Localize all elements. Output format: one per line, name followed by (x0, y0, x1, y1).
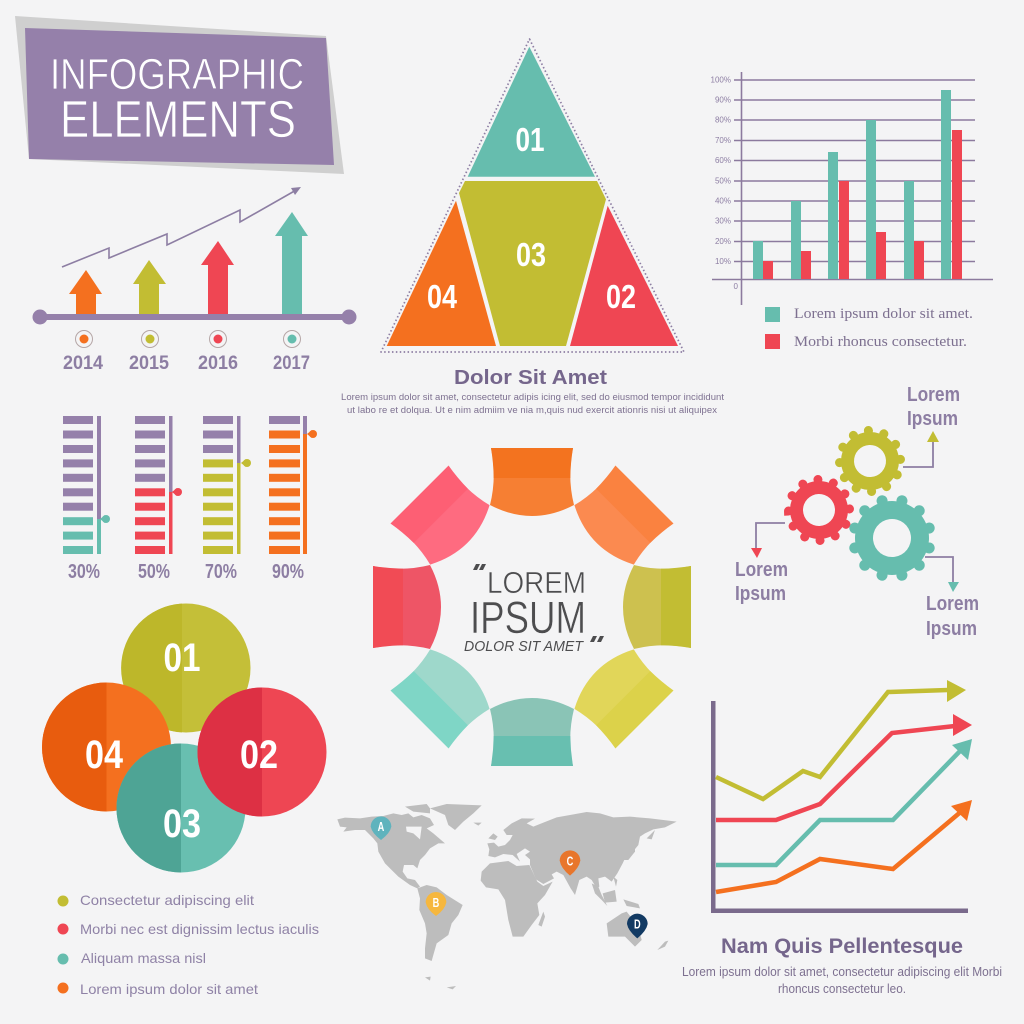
gear labels: Lorem (907, 384, 960, 406)
connector arrow: red gear (751, 523, 785, 558)
pin D (627, 914, 648, 938)
segment 03 (459, 181, 606, 346)
gear labels: Lorem (926, 593, 979, 615)
circles legend: Morbi nec est dignissim lectus iaculis (80, 921, 319, 937)
gear: teal (845, 491, 939, 585)
chart axes (711, 701, 968, 913)
circle numbers: 04 (85, 733, 124, 777)
ring segment: olive (623, 565, 691, 649)
octagonal ring diagram (373, 448, 691, 766)
year labels: 2016 (198, 353, 238, 374)
column 30% (63, 416, 110, 583)
axis labels: 20% (715, 237, 731, 246)
gear labels: Ipsum (926, 618, 977, 640)
circle numbers: 02 (240, 733, 278, 777)
gear labels (735, 384, 979, 640)
world map with pins (337, 804, 677, 989)
ring centre text: LOREM (487, 565, 586, 600)
pin A: A (378, 820, 384, 834)
pin C (560, 850, 580, 876)
axis labels (711, 76, 739, 291)
gear: olive (838, 429, 902, 493)
trend line arrow (62, 187, 301, 267)
gear labels: Ipsum (735, 583, 786, 605)
progress columns (63, 416, 317, 583)
triangle description (341, 392, 724, 416)
growth arrows timeline (32, 187, 356, 374)
axis labels: 0 (734, 282, 739, 291)
grid lines and axes (712, 72, 993, 305)
ring segment: mint (390, 642, 497, 749)
bar chart legend (765, 306, 973, 350)
segment 02 (570, 206, 678, 346)
circle 01 (121, 604, 251, 732)
ring segment: orange top (490, 448, 574, 516)
circles legend: Consectetur adipiscing elit (80, 892, 254, 908)
gear labels: Lorem (735, 559, 788, 581)
ring centre text (464, 564, 604, 655)
year labels: 2015 (129, 353, 169, 374)
line chart description: Lorem ipsum dolor sit amet, consectetur adipiscing elit Morbi (682, 965, 1002, 979)
overlapping circles diagram (42, 604, 326, 872)
year labels: 2017 (273, 353, 310, 374)
arrow 2017 (275, 212, 308, 315)
ring segment: red (373, 565, 441, 649)
axis labels: 70% (715, 136, 731, 145)
dotted outline (381, 39, 684, 352)
red line arrow (716, 714, 972, 820)
column 90%: 90% (272, 561, 304, 583)
arrow 2016 (201, 241, 234, 315)
segment numbers: 03 (516, 236, 546, 273)
arrow 2014 (69, 270, 102, 315)
title banner (15, 16, 344, 174)
circle numbers (85, 636, 278, 846)
axis labels: 50% (715, 176, 731, 186)
ring segment: yellow (567, 642, 674, 749)
axis labels: 10% (715, 257, 731, 266)
pin A (371, 816, 391, 840)
axis labels: 30% (715, 216, 731, 226)
ring segment: teal bottom (490, 698, 574, 766)
axis labels: 90% (715, 96, 731, 104)
circles legend: Aliquam massa nisl (81, 950, 206, 966)
circle 04 (42, 682, 171, 812)
circle numbers: 01 (164, 636, 200, 680)
connector arrow: olive gear (903, 431, 939, 467)
hudson bay (406, 827, 422, 839)
segment numbers: 04 (427, 278, 458, 315)
red bars (763, 130, 962, 279)
axis labels: 100% (711, 76, 731, 84)
triangle diagram (341, 39, 724, 416)
circles legend: Lorem ipsum dolor sit amet (80, 981, 258, 997)
column 50%: 50% (138, 561, 170, 583)
timeline axis (32, 310, 356, 324)
bar chart (711, 72, 993, 350)
bar chart legend: Morbi rhoncus consectetur. (794, 334, 967, 350)
column 90% (269, 416, 317, 583)
circle 02 (198, 688, 326, 816)
arrow 2015 (133, 260, 166, 315)
title banner: ELEMENTS (60, 91, 296, 149)
column 30%: 30% (68, 561, 100, 583)
column 50% (135, 416, 182, 583)
segment numbers: 02 (606, 278, 636, 315)
title banner: INFOGRAPHIC (50, 50, 304, 99)
year labels (63, 353, 310, 374)
ring segment: light orange (567, 465, 674, 572)
column 70% (203, 416, 251, 583)
segment numbers: 01 (516, 121, 544, 158)
segment 01 (468, 47, 595, 177)
axis labels: 60% (715, 156, 731, 165)
triangle description: Lorem ipsum dolor sit amet, consectetur adipis icing elit, sed do eiusmod tempor incididunt (341, 392, 724, 403)
triangle description: ut labo re et dolqua. Ut e nim admiim ve nia m,quis nud exercit ationris nisi ut aliquipex (347, 405, 717, 416)
teal bars (753, 90, 951, 279)
axis labels: 40% (715, 196, 731, 206)
pin C: C (567, 855, 573, 869)
gear: red (787, 478, 851, 542)
circle numbers: 03 (163, 802, 201, 846)
gear labels: Ipsum (907, 408, 958, 430)
ring centre text: IPSUM (470, 592, 586, 643)
line chart (682, 680, 1002, 996)
line chart description: rhoncus consectetur leo. (778, 982, 906, 996)
circles legend (58, 892, 319, 997)
triangle heading: Dolor Sit Amet (454, 366, 607, 389)
column 70%: 70% (205, 561, 237, 583)
olive line arrow (716, 680, 966, 799)
connector arrow: teal gear (925, 557, 959, 592)
ring segment: pink (390, 465, 497, 572)
bar chart legend: Lorem ipsum dolor sit amet. (794, 306, 973, 322)
continents (337, 804, 677, 989)
pin B: B (433, 896, 439, 910)
pin D: D (634, 918, 641, 932)
year marker dots (76, 330, 300, 348)
year labels: 2014 (63, 353, 103, 374)
segment numbers (427, 121, 636, 315)
axis labels: 80% (715, 116, 731, 124)
line chart description (682, 965, 1002, 996)
ring centre text: DOLOR SIT AMET (464, 638, 585, 655)
line chart heading: Nam Quis Pellentesque (721, 935, 963, 958)
circle 03 (116, 744, 245, 872)
pin B (426, 892, 446, 916)
orange line arrow (716, 800, 972, 892)
teal line arrow (716, 739, 972, 865)
gears diagram (735, 384, 979, 640)
segment 04 (387, 201, 496, 346)
